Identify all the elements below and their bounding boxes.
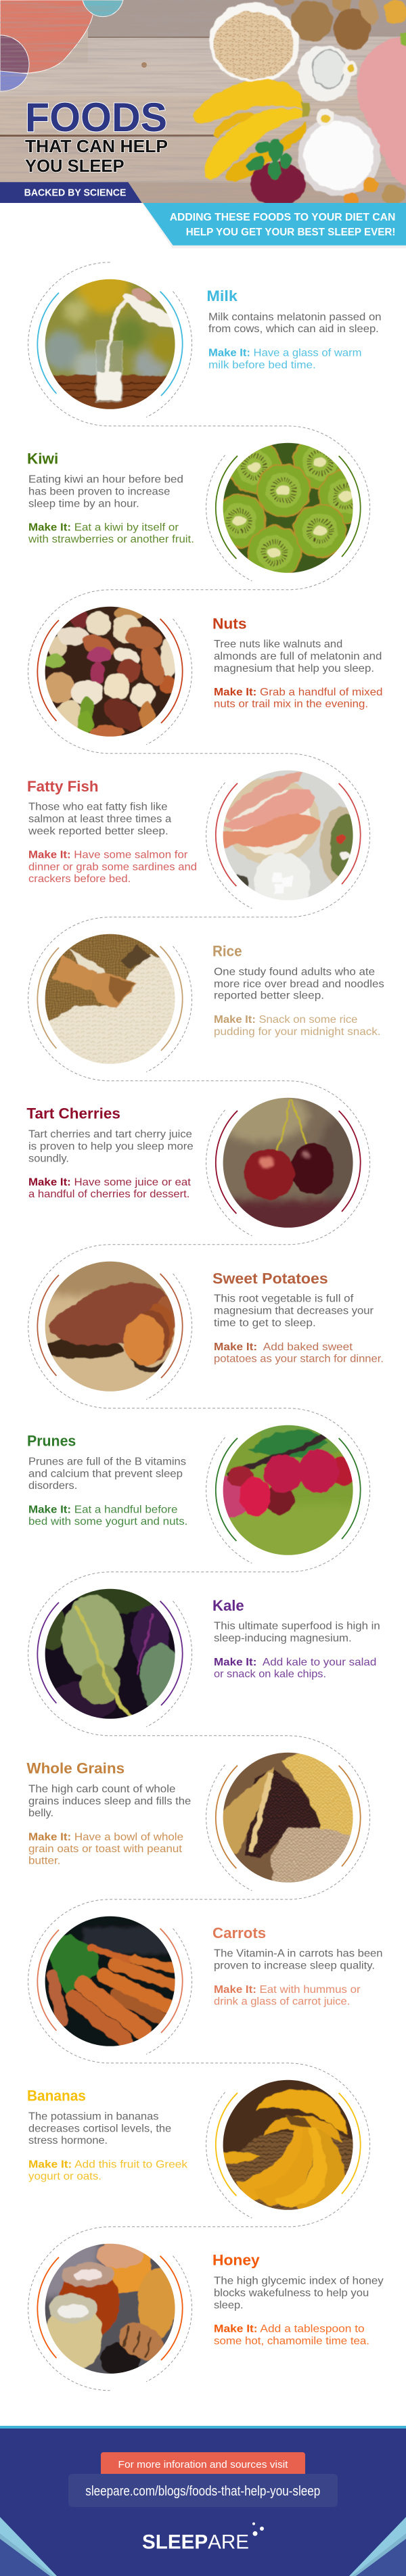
panel: Sweet Potatoes	[37, 1261, 383, 1392]
body text: belly.	[28, 1808, 53, 1819]
body text: and calcium that prevent sleep	[28, 1468, 183, 1479]
make it tip: Make It: Add this fruit to Greek	[28, 2159, 188, 2170]
make it tip: Make It: Grab a handful of mixed	[214, 687, 383, 698]
body text: from cows, which can aid in sleep.	[208, 323, 379, 335]
make it tip: Make It: Have a glass of warm	[208, 348, 361, 359]
decorative ring arcs	[216, 456, 361, 559]
bananas	[214, 112, 257, 137]
body text: is proven to help you sleep more	[28, 1141, 194, 1153]
decorative ring arcs	[37, 292, 183, 396]
corner triangles left	[0, 2517, 57, 2576]
photo: honey jars and dipper	[36, 2234, 185, 2383]
body text: has been proven to increase	[28, 486, 170, 497]
make it tip: Make It: Add kale to your salad	[214, 1657, 376, 1668]
body text: reported better sleep.	[214, 990, 324, 1002]
decorative ring arcs	[216, 1111, 361, 1214]
body text	[28, 1456, 186, 1492]
body text	[214, 1948, 383, 1972]
raw meat	[357, 34, 406, 189]
decorative ring arcs	[37, 946, 183, 1051]
banner: backed by science	[0, 182, 142, 203]
photo: red fish on plate	[223, 770, 353, 900]
body text	[28, 1129, 194, 1164]
walnuts and almonds	[292, 1, 332, 41]
heading: Bananas: Bananas	[27, 2088, 86, 2104]
photo: kiwi slices	[223, 442, 353, 573]
heading: Fatty Fish: Fatty Fish	[27, 778, 99, 795]
body text: Milk contains melatonin passed on	[208, 311, 382, 323]
body text	[28, 802, 171, 837]
panel: Kiwi	[28, 442, 361, 573]
corner triangles right	[349, 2517, 406, 2576]
panel: Fatty Fish	[28, 770, 361, 900]
body text: almonds are full of melatonin and	[214, 651, 382, 662]
banner: backed by science: BACKED BY SCIENCE	[24, 187, 126, 198]
body text: stress hormone.	[28, 2135, 108, 2146]
photo: bananas in basket	[214, 2071, 363, 2220]
decorative ring arcs	[37, 1929, 183, 2033]
body text: salmon at least three times a	[28, 814, 171, 825]
plum	[250, 162, 306, 206]
photo: assorted whole grains	[223, 1752, 353, 1883]
make it tip: crackers before bed.	[28, 873, 131, 885]
body text: The high carb count of whole	[28, 1783, 175, 1795]
make it tip	[28, 1504, 187, 1527]
body text: disorders.	[28, 1480, 77, 1492]
body text	[214, 966, 384, 1002]
source url: sleepare.com/blogs/foods-that-help-you-sleep	[85, 2484, 320, 2499]
body text: Tree nuts like walnuts and	[214, 639, 342, 650]
photo: kale leaves	[45, 1588, 175, 1719]
teal circle overlay	[83, 0, 123, 17]
decorative ring arcs	[37, 2256, 183, 2360]
body text: sleep.	[214, 2299, 244, 2311]
body text	[28, 474, 183, 509]
make it tip: butter.	[28, 1856, 61, 1867]
make it tip: Make It: Eat with hummus or	[214, 1984, 361, 1996]
body text: This root vegetable is full of	[214, 1293, 354, 1305]
rice bowl	[208, 1, 300, 83]
source url	[68, 2474, 338, 2507]
daisies	[316, 62, 357, 126]
make it tip: Make It: Add baked sweet	[214, 1341, 353, 1353]
photo: plums on branch	[223, 1425, 353, 1555]
header photo: wooden table with foods	[0, 0, 406, 208]
yogurt bowl	[298, 115, 380, 196]
heading: Honey: Honey	[212, 2252, 260, 2269]
title: THAT CAN HELP: THAT CAN HELP	[25, 136, 168, 156]
panel: Whole Grains	[26, 1752, 361, 1883]
make it tip	[28, 1831, 183, 1867]
body text	[214, 1621, 380, 1644]
decorative ring arcs	[37, 1274, 183, 1378]
body text: grains induces sleep and fills the	[28, 1795, 191, 1807]
make it tip	[28, 1176, 191, 1200]
decorative ring arcs	[216, 1438, 361, 1541]
purple circle overlay	[0, 35, 29, 73]
make it tip	[28, 850, 197, 885]
panel: Milk	[37, 279, 380, 409]
sources label: For more inforation and sources visit	[118, 2459, 288, 2470]
body text: Prunes are full of the B vitamins	[28, 1456, 186, 1467]
oranges and cookie	[343, 176, 406, 203]
periwinkle circle overlay	[0, 71, 28, 91]
mint leaves	[244, 138, 291, 181]
body text	[214, 639, 382, 674]
make it tip: or snack on kale chips.	[214, 1669, 326, 1680]
body text: The Vitamin-A in carrots has been	[214, 1948, 383, 1960]
body text	[28, 2111, 171, 2146]
make it tip: Make It: Add a tablespoon to	[214, 2324, 365, 2335]
body text: blocks wakefulness to help you	[214, 2288, 369, 2299]
body text: Those who eat fatty fish like	[28, 802, 168, 813]
heading: Milk: Milk	[206, 288, 238, 304]
title: FOODS: FOODS	[25, 95, 167, 140]
make it tip: Make It: Have a bowl of whole	[28, 1831, 183, 1843]
make it tip: bed with some yogurt and nuts.	[28, 1516, 187, 1527]
panel: Honey	[36, 2234, 384, 2383]
make it tip: some hot, chamomile time tea.	[214, 2335, 369, 2347]
body text: The high glycemic index of honey	[214, 2276, 384, 2287]
body text	[208, 311, 382, 335]
heading: Prunes: Prunes	[27, 1433, 76, 1450]
body text	[214, 1293, 374, 1329]
photo: rice with wooden scoop	[45, 934, 175, 1064]
sources label	[101, 2452, 305, 2474]
decorative ring arcs	[37, 1601, 183, 1705]
body text: One study found adults who ate	[214, 966, 375, 978]
heading: Sweet Potatoes: Sweet Potatoes	[212, 1270, 328, 1287]
make it tip	[28, 522, 194, 545]
photo: milk pouring	[45, 279, 175, 409]
heading: Tart Cherries: Tart Cherries	[26, 1105, 120, 1122]
heading: Kiwi: Kiwi	[27, 451, 58, 467]
banner: intro callout	[142, 203, 406, 248]
make it tip: with strawberries or another fruit.	[28, 534, 194, 545]
make it tip: milk before bed time.	[208, 359, 316, 371]
make it tip	[214, 1657, 376, 1680]
make it tip	[208, 348, 361, 371]
make it tip: Make It: Have some juice or eat	[28, 1176, 191, 1188]
milk jar	[298, 45, 351, 101]
make it tip: dinner or grab some sardines and	[28, 861, 197, 873]
make it tip: potatoes as your starch for dinner.	[214, 1354, 384, 1365]
make it tip: grain oats or toast with peanut	[28, 1843, 183, 1855]
decorative ring arcs	[37, 619, 183, 723]
photo: mixed nuts	[45, 606, 175, 737]
panel: Bananas	[28, 2079, 361, 2210]
body text: decreases cortisol levels, the	[28, 2123, 171, 2134]
body text: Tart cherries and tart cherry juice	[28, 1129, 192, 1141]
decorative ring arcs	[216, 1766, 361, 1868]
wood grain texture	[0, 0, 398, 183]
decorative ring arcs	[216, 783, 361, 886]
make it tip	[214, 1014, 380, 1038]
make it tip	[214, 1984, 361, 2008]
make it tip	[214, 2324, 369, 2347]
make it tip: Make It: Eat a handful before	[28, 1504, 177, 1515]
make it tip: yogurt or oats.	[28, 2171, 102, 2182]
logo: Sleepare	[142, 2523, 264, 2553]
salmon circle overlay	[0, 0, 93, 73]
dashed connector path	[28, 262, 370, 2391]
logo: Sleepare: SLEEPARE	[142, 2531, 249, 2553]
body text: sleep-inducing magnesium.	[214, 1633, 352, 1644]
banner: intro callout: HELP YOU GET YOUR BEST SLEEP EVER!	[186, 227, 395, 238]
photo: two cherries	[223, 1097, 353, 1228]
make it tip	[28, 2159, 188, 2182]
make it tip: nuts or trail mix in the evening.	[214, 699, 368, 710]
body text: more rice over bread and noodles	[214, 978, 384, 990]
title: YOU SLEEP: YOU SLEEP	[25, 156, 125, 176]
body text: week reported better sleep.	[28, 825, 168, 837]
make it tip: Make It: Snack on some rice	[214, 1014, 358, 1026]
make it tip	[214, 1341, 384, 1365]
banner: intro callout: ADDING THESE FOODS TO YOUR DIET CAN	[170, 212, 395, 223]
panel: Kale	[37, 1588, 380, 1719]
body text: Eating kiwi an hour before bed	[28, 474, 183, 485]
panel: Tart Cherries	[27, 1097, 361, 1228]
panel: Rice	[37, 934, 384, 1064]
body text: magnesium that help you sleep.	[214, 663, 374, 674]
make it tip: Make It: Eat a kiwi by itself or	[28, 522, 179, 533]
title	[25, 95, 168, 176]
body text	[214, 2276, 384, 2311]
body text: proven to increase sleep quality.	[214, 1960, 375, 1972]
heading: Carrots: Carrots	[212, 1925, 266, 1941]
footer	[0, 2426, 406, 2576]
photo: bunch of carrots	[45, 1916, 175, 2046]
make it tip: drink a glass of carrot juice.	[214, 1996, 350, 2008]
body text: The potassium in bananas	[28, 2111, 158, 2122]
panel: Carrots	[37, 1916, 382, 2046]
heading: Kale: Kale	[212, 1597, 244, 1614]
body text: soundly.	[28, 1153, 69, 1164]
heading: Whole Grains: Whole Grains	[26, 1760, 125, 1777]
heading: Nuts: Nuts	[212, 615, 246, 632]
decorative ring arcs	[216, 2093, 361, 2196]
foods on table	[193, 0, 406, 208]
body text: magnesium that decreases your	[214, 1306, 374, 1317]
body text: sleep time by an hour.	[28, 498, 139, 509]
heading: Rice: Rice	[212, 942, 242, 959]
body text	[28, 1783, 191, 1819]
photo: sweet potato with slices	[45, 1261, 175, 1392]
make it tip	[214, 687, 383, 710]
footer background	[0, 2429, 406, 2576]
make it tip: a handful of cherries for dessert.	[28, 1189, 189, 1200]
panel: Nuts	[37, 606, 382, 737]
panel: Prunes	[28, 1425, 361, 1555]
make it tip: pudding for your midnight snack.	[214, 1026, 380, 1038]
make it tip: Make It: Have some salmon for	[28, 850, 188, 861]
body text: time to get to sleep.	[214, 1318, 316, 1329]
body text: This ultimate superfood is high in	[214, 1621, 380, 1632]
